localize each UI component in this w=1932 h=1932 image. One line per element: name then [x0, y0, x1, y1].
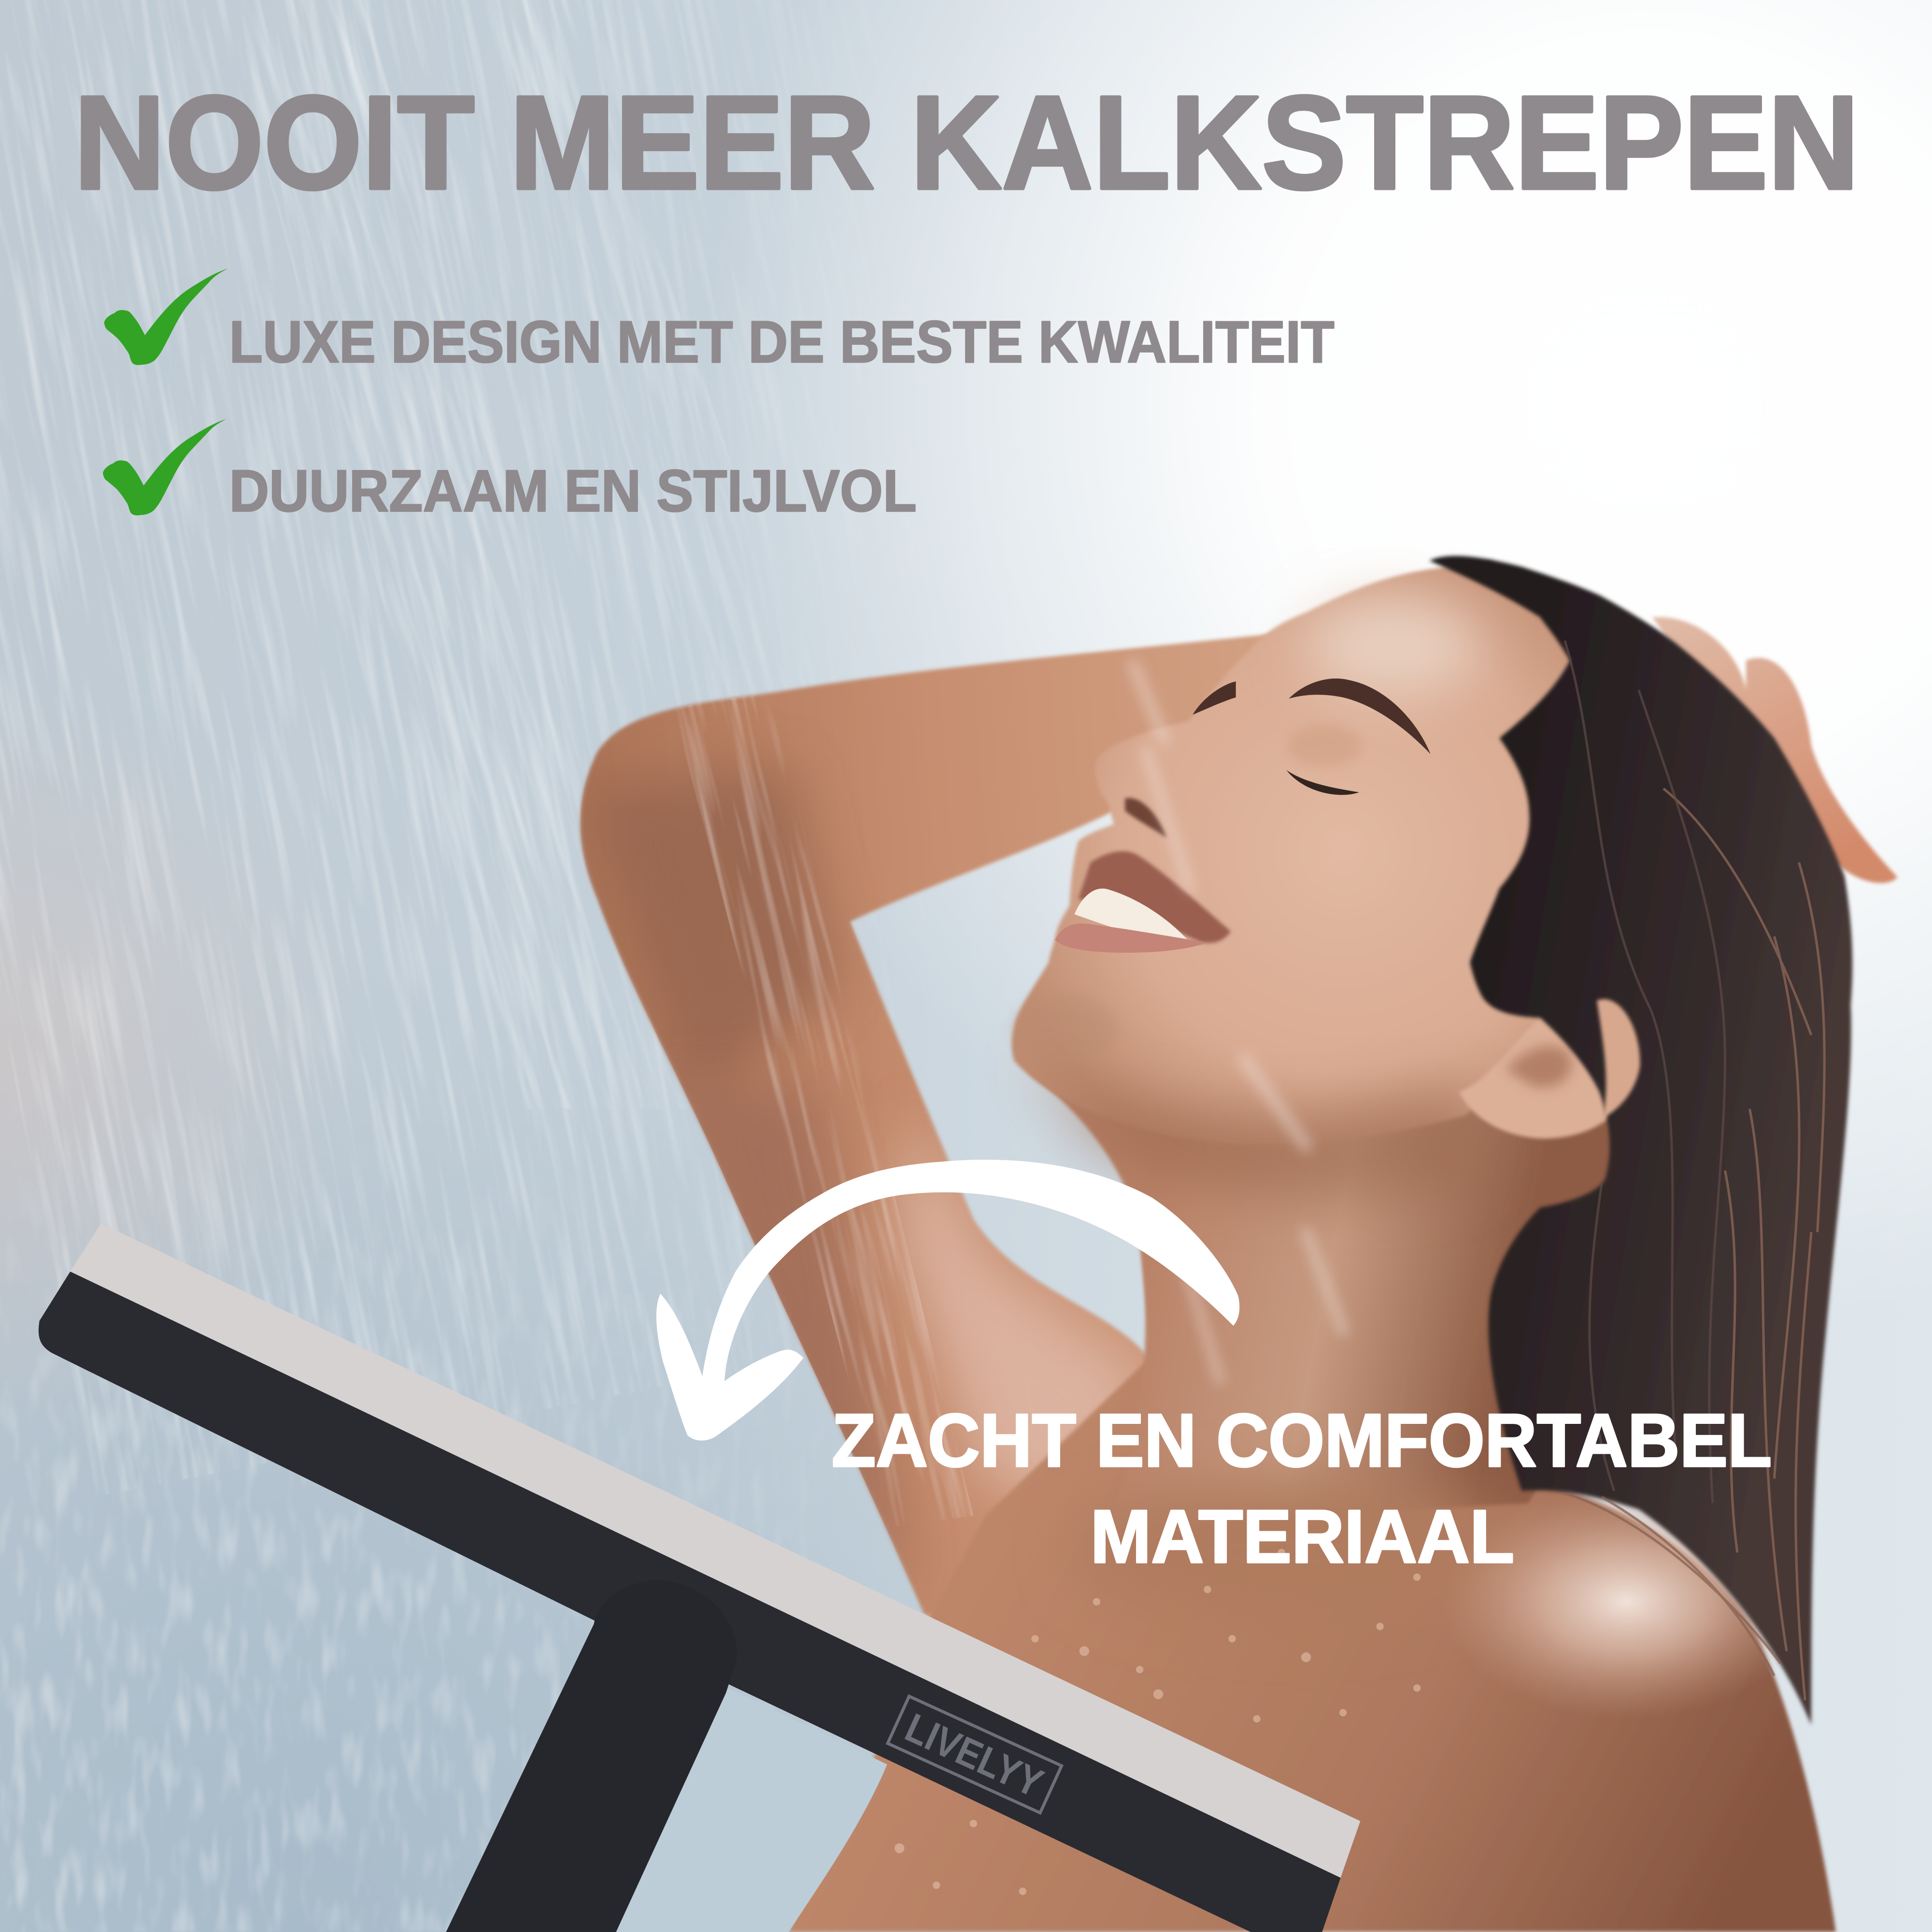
callout text: MATERIAAL [1091, 1494, 1514, 1578]
water on face and neck [1134, 666, 1343, 1380]
neck blending onto chest [1072, 1478, 1516, 1626]
feature text: LUXE DESIGN MET DE BESTE KWALITEIT [229, 309, 1335, 375]
raised arm [579, 633, 1275, 1639]
nose shadow [1125, 798, 1167, 838]
icon: green check [103, 419, 227, 515]
forehead light [1306, 597, 1478, 696]
curved white arrow [656, 1160, 1239, 1440]
arm shading [579, 764, 1146, 1602]
jaw shadow [1023, 1047, 1478, 1199]
upper body [789, 1109, 1836, 1932]
hair strands [1565, 641, 1824, 1700]
eyebrows and eyes [1193, 679, 1431, 795]
callout text: ZACHT EN COMFORTABEL [832, 1398, 1772, 1482]
callout text [832, 1398, 1772, 1578]
chin shadow [1014, 994, 1118, 1064]
falling water streaks [0, 0, 743, 1932]
hair [1429, 556, 1852, 1725]
hand behind head [1652, 617, 1898, 883]
wall seen between handle and skin [616, 1688, 887, 1932]
woman showering [438, 515, 1898, 1932]
face [1012, 561, 1602, 1145]
title: NOOIT MEER KALKSTREPEN [74, 69, 1859, 217]
shoulder highlight [1442, 1485, 1811, 1719]
silicone blade [70, 1223, 1360, 1878]
feature text: DUURZAAM EN STIJLVOL [229, 458, 917, 524]
squeegee product [39, 1223, 1360, 1932]
feature 1 [104, 269, 1335, 375]
handle [446, 1580, 737, 1932]
icon: green check [104, 269, 228, 365]
ear [1459, 995, 1641, 1138]
neck [1029, 937, 1626, 1528]
back of ear in front of hair [1597, 999, 1640, 1119]
logo LIVELYY: LIVELYY [899, 1705, 1050, 1806]
water on skin [438, 515, 1271, 1662]
droplets on chest [895, 1549, 1421, 1895]
ear shadow [1506, 1046, 1572, 1087]
mouth [1055, 851, 1231, 953]
feature 2 [103, 419, 917, 524]
black bar [39, 1272, 1341, 1932]
